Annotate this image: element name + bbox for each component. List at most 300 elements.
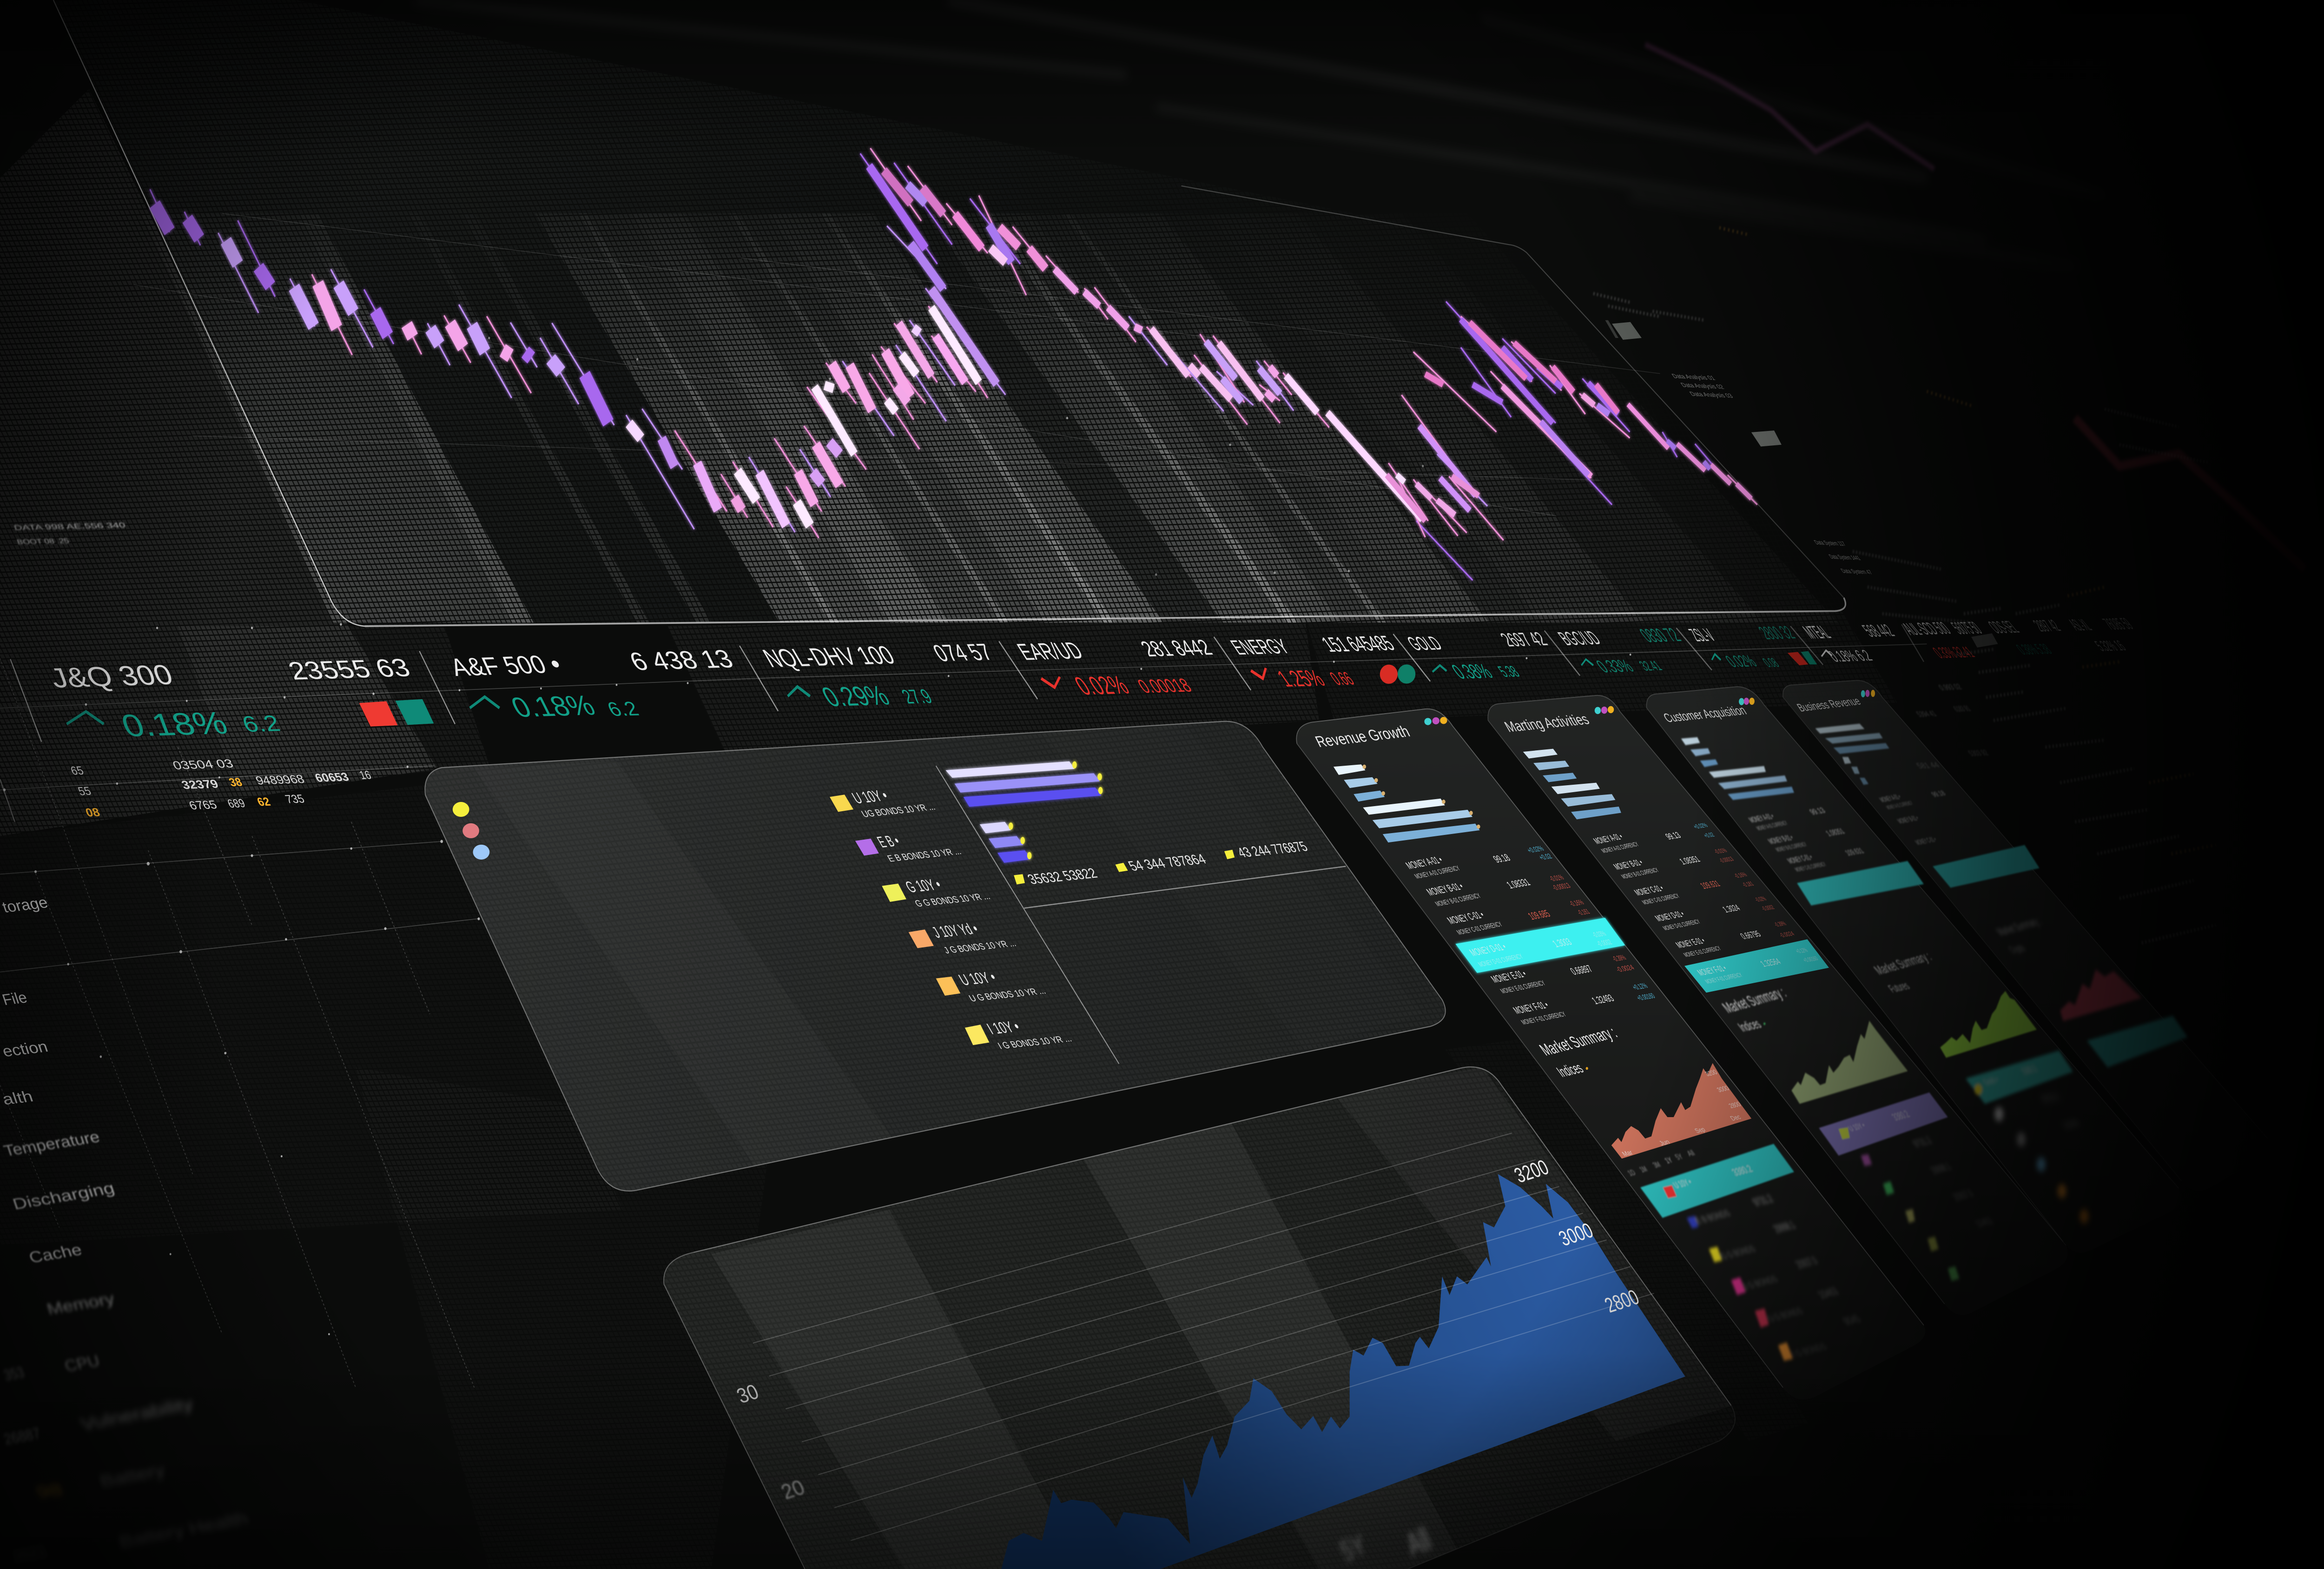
ticker names and prices: 23555 63 xyxy=(284,653,414,685)
change values: -0.0002 xyxy=(1760,904,1776,912)
heading: Revenue Growth xyxy=(1312,722,1413,750)
legend labels xyxy=(849,786,1074,1051)
ticker names and prices: 2897 42 xyxy=(2029,616,2065,635)
ticker up values teal: 2800 32 xyxy=(1754,622,1799,643)
change values: -0.39% xyxy=(1772,920,1788,928)
background dotted texture left xyxy=(0,89,1897,1569)
bar totals: 54 344 787864 xyxy=(1126,852,1209,874)
highlighted row: MONEY D-01 • xyxy=(1467,941,1509,958)
ticker names and prices: BGC/UD xyxy=(1554,628,1605,649)
left system labels: File xyxy=(0,988,29,1008)
left system labels: torage xyxy=(0,894,50,916)
ticker names and prices: EAR/UD xyxy=(1012,637,1088,665)
legend labels: E B • xyxy=(874,832,903,851)
market summary: Market Summary : xyxy=(1719,984,1790,1016)
ticker up values teal xyxy=(116,622,2056,743)
ticker names and prices: 568 442 xyxy=(1858,621,1899,641)
change values: +0.02 xyxy=(1702,831,1716,839)
chart axis labels: 3000 xyxy=(1555,1218,1597,1250)
window dots xyxy=(1424,717,1447,725)
currency rows: MONEY C-01 CURRENCY xyxy=(1793,861,1828,873)
currency rows: 99.13 xyxy=(1807,806,1828,816)
market summary xyxy=(1536,1023,1621,1080)
index rows xyxy=(1861,1135,1995,1281)
small number rows xyxy=(69,757,373,820)
area chart: Mar xyxy=(1620,1148,1634,1158)
currency rows: MONEY B-01 • xyxy=(1895,814,1921,825)
far right data readouts xyxy=(1593,228,2216,943)
left bodies xyxy=(155,204,608,423)
purple index row: 3380.2 xyxy=(1889,1109,1912,1123)
status text xyxy=(1915,682,1990,770)
ticker down values red: 1.25% xyxy=(1272,665,1330,692)
index rows xyxy=(1994,1091,2089,1224)
wicks xyxy=(150,148,1757,580)
area chart xyxy=(2060,969,2142,1021)
area chart: 3200 xyxy=(1703,1068,1719,1078)
ticker down values red: 0.33% 32.41 xyxy=(1929,643,1979,662)
currency rows: MONEY C-01 • xyxy=(1632,883,1666,897)
area chart: 3000 xyxy=(1715,1084,1731,1093)
legend swatches xyxy=(830,794,990,1045)
index rows: 9045 xyxy=(1840,1313,1863,1327)
ticker names and prices: 151 645485 xyxy=(1316,631,1400,656)
left system labels: Discharging xyxy=(10,1179,117,1213)
left system labels: Vulnerability xyxy=(78,1394,196,1434)
currency rows xyxy=(1747,806,1866,873)
index rows: 10463 xyxy=(1973,1216,1995,1230)
panel: bond legend and bars xyxy=(423,721,1446,1195)
index rows: 2999 xyxy=(2060,1118,2083,1132)
chart axis labels: 2800 xyxy=(1601,1285,1643,1317)
currency rows: 99.18 xyxy=(1491,852,1512,865)
ticker up values teal: 0.02% xyxy=(1721,651,1761,670)
panel: Business Revenue card xyxy=(1783,681,2270,1191)
teal index row xyxy=(2087,1016,2188,1067)
index rows: 20937.0 xyxy=(1793,1255,1820,1271)
market summary: Crypto xyxy=(2007,943,2028,956)
market summary: Futures xyxy=(1885,980,1912,995)
left system labels: CPU xyxy=(62,1352,102,1375)
background grid with nodes xyxy=(0,623,1927,1388)
chart gridlines xyxy=(753,1133,1654,1541)
legend labels: G 10Y • xyxy=(902,875,944,896)
ticker names and prices: 6 438 13 xyxy=(625,645,738,676)
status swatches xyxy=(359,651,1817,727)
tiny readout upper left: BOOT 08 .25 xyxy=(16,537,70,546)
currency rows: MONEY A-01 CURRENCY xyxy=(1413,865,1462,880)
change values: -0.00013 xyxy=(1551,882,1572,892)
small number rows: 32379 xyxy=(179,778,221,792)
small number rows: 55 xyxy=(76,785,93,798)
area chart: Sep xyxy=(1693,1125,1707,1134)
window dots xyxy=(453,802,489,860)
range selector xyxy=(1626,1149,1697,1178)
data analysis labels: Data Analysis 03 xyxy=(1688,390,1735,399)
highlighted row xyxy=(1455,918,1625,973)
currency rows: MONEY D-01 • xyxy=(1653,909,1687,923)
ticker names and prices: ENERGY xyxy=(1226,635,1294,659)
chart axis labels: 5Y xyxy=(1336,1529,1371,1568)
heading: Customer Acquisition xyxy=(1661,703,1749,725)
dim data dashes xyxy=(1593,228,2216,943)
ticker names and prices: GOLD xyxy=(1403,633,1446,654)
highlighted row: +0.00160 xyxy=(1801,955,1820,964)
ticker names and prices: ZSL-V xyxy=(1684,625,1719,645)
currency rows: MONEY A-01 CURRENCY xyxy=(1885,800,1915,811)
chart axis labels xyxy=(733,1155,1643,1568)
index rows: 29998.1 xyxy=(1928,1161,1954,1176)
small number rows: 6765 xyxy=(187,798,219,812)
ticker names and prices: J&Q 300 xyxy=(46,660,177,694)
legend labels: U G BONDS 10 YR ... xyxy=(967,986,1048,1004)
legend labels: UG BONDS 10 YR ... xyxy=(860,802,938,820)
ticker names and prices: A&F 500 • xyxy=(446,650,566,682)
highlighted row: -0.03% xyxy=(1591,930,1608,939)
area chart: Dec xyxy=(1729,1113,1743,1122)
index rows: 20937.0 xyxy=(1950,1188,1976,1203)
middle bodies xyxy=(629,351,911,525)
currency rows: 0.66897 xyxy=(1568,963,1595,977)
currency rows: MONEY B-01 • xyxy=(1766,833,1796,846)
range selector: 1Y xyxy=(1663,1156,1675,1165)
currency rows: MONEY E-01 • xyxy=(1489,968,1529,985)
far dim pink chart top right xyxy=(1645,45,2305,569)
window dots xyxy=(1861,690,1875,697)
currency rows: MONEY C-01 • xyxy=(1785,853,1815,865)
change values: -0.01% xyxy=(1712,847,1729,855)
area chart xyxy=(1791,1021,1908,1104)
area chart xyxy=(1001,1174,1685,1569)
range selector: 5Y xyxy=(1673,1152,1685,1162)
left system labels: Battery Health xyxy=(117,1509,250,1551)
teal index row xyxy=(1966,1051,2073,1104)
ticker up values teal: 6.2 xyxy=(238,711,284,737)
ticker names and prices: 2697 42 xyxy=(1496,629,1552,651)
currency rows: MONEY A-01 • xyxy=(1403,854,1445,871)
panel: Revenue Growth card xyxy=(1296,709,1925,1399)
ticker up values teal: 0.29% xyxy=(816,681,895,712)
left system labels: 353 xyxy=(2,1364,26,1384)
horizontal bars xyxy=(945,761,1103,863)
teal index row: 3380.2 xyxy=(1730,1163,1755,1178)
index rows: I G BONDS xyxy=(1789,1341,1829,1359)
area chart xyxy=(1940,991,2037,1058)
small number rows: 38 xyxy=(227,776,244,789)
legend labels: I 10Y • xyxy=(984,1017,1023,1038)
left system labels: 2021 xyxy=(11,1543,48,1565)
right bodies xyxy=(1055,269,1422,519)
panel: blue index chart xyxy=(661,1064,1740,1569)
market summary: Market Summary : xyxy=(1994,915,2044,938)
currency rows: MONEY B-01 CURRENCY xyxy=(1434,892,1483,908)
ticker names and prices: MTEAL xyxy=(1798,622,1835,642)
small number rows: 16 xyxy=(357,768,373,782)
purple index row xyxy=(1819,1092,1948,1156)
change values: -0.39% xyxy=(1611,953,1628,963)
highlighted row xyxy=(1933,845,2040,887)
currency rows: MONEY C-01 CURRENCY xyxy=(1455,920,1504,937)
change values: -0.0024 xyxy=(1777,930,1796,939)
ticker names and prices: 56075 50 xyxy=(1947,618,1986,638)
chart axis labels: 3200 xyxy=(1511,1155,1552,1187)
small number rows: 689 xyxy=(225,797,247,810)
window dots xyxy=(1595,706,1614,714)
ticker down values red: 0.02% xyxy=(1069,671,1135,700)
market summary: Indices xyxy=(1735,1017,1764,1034)
currency rows: MONEY B-01 CURRENCY xyxy=(1774,841,1809,853)
currency rows: MONEY A-01 • xyxy=(1747,812,1776,824)
left system labels xyxy=(0,894,250,1565)
currency rows: 99.13 xyxy=(1663,830,1683,841)
legend labels: J 10Y Yd • xyxy=(929,920,982,941)
small number rows: 735 xyxy=(284,793,306,806)
currency rows xyxy=(1591,830,1763,958)
left system labels: 26887 xyxy=(2,1425,43,1448)
bar totals: 43 244 776875 xyxy=(1235,839,1311,861)
left system labels: alth xyxy=(0,1087,35,1108)
ticker up values teal: 6.2 xyxy=(603,697,642,720)
change values: +0.02% xyxy=(1525,845,1546,855)
data analysis labels: Data System 117 xyxy=(1812,539,1847,547)
highlighted row: 1.3003 xyxy=(1550,936,1574,949)
teal index row: 3380.2 xyxy=(2019,1064,2040,1077)
change values: +0.02% xyxy=(1691,821,1709,830)
panel grid lines and nodes xyxy=(133,213,1660,576)
data analysis labels: Data Analysis 02 xyxy=(1679,381,1726,390)
legend labels: J G BONDS 10 YR ... xyxy=(942,939,1018,956)
currency rows: MONEY C-01 • xyxy=(1913,835,1939,847)
data analysis labels: Data Analysis 01 xyxy=(1670,372,1717,381)
ticker up values teal: 0.18% xyxy=(116,705,232,743)
change values: -0.16% xyxy=(1568,899,1586,908)
currency rows: 1.3024 xyxy=(1720,903,1742,914)
change values xyxy=(1691,821,1796,939)
currency rows: 99.18 xyxy=(1929,789,1948,799)
currency rows: MONEY A-01 • xyxy=(1591,831,1625,846)
currency rows: 109.685 xyxy=(1525,908,1553,922)
ticker names and prices: 281 8442 xyxy=(1136,636,1217,662)
currency rows xyxy=(1403,852,1617,1026)
currency rows: MONEY C-01 CURRENCY xyxy=(1640,892,1681,906)
index rows: 9731.2 xyxy=(2039,1091,2062,1105)
index rows: G G BONDS xyxy=(1718,1244,1757,1261)
currency rows: 1.08351 xyxy=(1677,854,1702,866)
ticker row xyxy=(0,615,2137,822)
legend labels: U 10Y • xyxy=(955,968,999,988)
legend labels: U 10Y • xyxy=(849,786,891,807)
range selector: 3M xyxy=(1651,1160,1663,1170)
highlighted row: MONEY F-01 CURRENCY xyxy=(1703,971,1744,985)
change values: -0.02% xyxy=(1753,895,1768,903)
ticker up values teal: 5.38 xyxy=(1494,663,1523,681)
ticker up values teal: 27.9 xyxy=(898,685,936,708)
currency rows: 109.631 xyxy=(1698,879,1722,891)
tiny readout upper left: DATA 998 AE.556 340 xyxy=(13,522,126,532)
currency rows: MONEY D-01 CURRENCY xyxy=(1661,918,1702,932)
ticker down values red: 0.66 xyxy=(1326,669,1358,689)
ticker names and prices: 76085 59 xyxy=(2099,615,2137,633)
heading: Marting Activities xyxy=(1501,711,1592,735)
area chart: Jun xyxy=(1657,1138,1671,1147)
currency rows xyxy=(1878,789,1948,847)
index rows: 29998.1 xyxy=(1770,1219,1798,1235)
heading: Business Revenue xyxy=(1795,695,1863,714)
small number rows: 62 xyxy=(255,795,272,809)
currency rows: 0.66795 xyxy=(1738,929,1763,941)
window dots xyxy=(1739,698,1755,705)
highlighted row xyxy=(1797,861,1924,906)
change values: -0.00013 xyxy=(1717,855,1735,864)
index rows: 9731.2 xyxy=(1750,1193,1776,1208)
market summary xyxy=(1994,915,2044,956)
currency rows: MONEY F-01 CURRENCY xyxy=(1520,1011,1568,1026)
status text: 6183 91 xyxy=(1952,704,1973,713)
ticker names and prices: ODS-SEL xyxy=(1984,617,2023,637)
change values: -0.0024 xyxy=(1614,964,1636,974)
currency rows: 1.08351 xyxy=(1824,827,1847,838)
teal index row: Gold • xyxy=(1981,1075,2001,1087)
small number rows: 9489968 xyxy=(254,773,306,788)
bars xyxy=(1815,724,1889,785)
currency rows: MONEY B-01 CURRENCY xyxy=(1620,867,1660,880)
change values: +0.02 xyxy=(1537,853,1554,862)
ticker down values red: 0.00018 xyxy=(1133,675,1196,697)
ticker up values teal: 0.18% xyxy=(506,690,601,723)
range selector: All xyxy=(1685,1149,1697,1158)
bar totals xyxy=(1014,839,1311,887)
ticker up values teal: 32.41 xyxy=(1636,658,1665,674)
index rows: U G BONDS xyxy=(1766,1306,1805,1324)
panel: Marting Activities card xyxy=(1488,695,2068,1315)
ticker up values teal: 0.38% 5.38 xyxy=(2013,641,2056,658)
panel: main candlestick chart surface xyxy=(53,0,1845,626)
left system labels: Battery xyxy=(98,1460,167,1490)
left system labels: Memory xyxy=(44,1290,117,1318)
legend labels: E B BONDS 10 YR ... xyxy=(886,847,963,864)
status text: 5394 41 xyxy=(1915,709,1939,719)
change values: +0.12% xyxy=(1631,982,1650,992)
highlighted row: MONEY F-01 • xyxy=(1695,963,1729,978)
currency rows: MONEY A-01 CURRENCY xyxy=(1599,841,1640,854)
currency rows: MONEY F-01 • xyxy=(1511,999,1551,1016)
highlighted row: -0.0002 xyxy=(1595,938,1614,948)
status text: 581 44 xyxy=(1915,761,1941,770)
chart panel outline xyxy=(53,0,1845,626)
area chart xyxy=(1611,1063,1751,1159)
left system labels: ection xyxy=(0,1038,50,1060)
bars xyxy=(1334,764,1480,842)
teal index row xyxy=(1640,1144,1794,1218)
left system labels: Temperature xyxy=(1,1128,102,1160)
ticker up values teal: 0830 72 xyxy=(1635,624,1686,647)
market summary xyxy=(1719,984,1790,1034)
blue chart streaks xyxy=(661,1064,1740,1569)
range selector: 1M xyxy=(1637,1165,1650,1174)
chart axis labels: 30 xyxy=(733,1379,762,1408)
change values: -0.161 xyxy=(1576,908,1591,917)
market summary: Market Summary : xyxy=(1536,1023,1621,1059)
grey status chips xyxy=(1605,320,1998,648)
ticker names and prices xyxy=(46,615,2137,694)
panel dividers xyxy=(936,766,1346,1064)
small number rows: 65 xyxy=(69,764,86,778)
purple index row: U 10Y • xyxy=(1846,1121,1868,1133)
ticker names and prices: 0.18% 6.2 xyxy=(1824,647,1876,665)
currency rows: MONEY A-01 • xyxy=(1878,793,1903,804)
status text: 5303 92 xyxy=(1966,748,1990,758)
ticker names and prices: ASL-XL xyxy=(2065,616,2096,634)
bar totals: 35632 53822 xyxy=(1025,866,1100,887)
index rows: 10463 xyxy=(1815,1285,1841,1301)
ticker names and prices: NQL-DHV 100 xyxy=(758,641,900,673)
data analysis labels: Data System 47 xyxy=(1839,567,1874,576)
ticker names and prices: AUL-SCD 500 xyxy=(1898,619,1955,639)
bars xyxy=(1523,749,1621,819)
ticker names and prices: 5.32% 16 xyxy=(2092,638,2130,655)
change values xyxy=(1525,845,1657,1002)
highlighted row: 1.32564 xyxy=(1758,956,1783,968)
currency rows: MONEY B-01 • xyxy=(1611,857,1645,872)
currency rows: MONEY C-01 • xyxy=(1445,909,1487,927)
change values: -0.01% xyxy=(1548,874,1566,883)
data analysis labels xyxy=(1670,372,1874,576)
panel texture xyxy=(475,726,1422,1165)
currency rows: 1.08331 xyxy=(1504,877,1533,891)
ticker dividers xyxy=(0,624,1924,822)
change values: -0.181 xyxy=(1740,880,1755,888)
small number rows: 08 xyxy=(84,806,102,820)
legend labels: I G BONDS 10 YR ... xyxy=(996,1034,1074,1051)
status text: 0.993 02 xyxy=(1937,682,1964,692)
data analysis labels: Data System 1441 xyxy=(1827,553,1862,561)
highlighted row: MONEY D-01 CURRENCY xyxy=(1477,953,1525,968)
ticker up values teal: 0.33% xyxy=(1592,656,1638,676)
legend labels: G G BONDS 10 YR ... xyxy=(913,892,992,909)
left system labels: Cache xyxy=(26,1241,84,1266)
index rows: E B BONDS xyxy=(1693,1208,1732,1225)
ticker up values teal: 0.08 xyxy=(1760,656,1783,670)
far-field blurred data lines at the top xyxy=(415,0,2105,267)
ticker names and prices: 074 57 xyxy=(928,638,997,666)
currency rows: 1.32493 xyxy=(1589,993,1617,1006)
market summary: Indices xyxy=(1553,1059,1587,1080)
small number rows: 03504 03 xyxy=(171,757,235,772)
bars xyxy=(1681,737,1794,800)
left system labels: 98 xyxy=(33,1480,65,1501)
highlighted row: +0.12% xyxy=(1794,947,1809,955)
ticker chevrons xyxy=(66,650,1832,724)
index rows: 9731.2 xyxy=(1910,1135,1934,1150)
chart axis labels: 20 xyxy=(778,1475,808,1504)
currency rows: MONEY E-01 CURRENCY xyxy=(1499,980,1547,995)
panel: Customer Acquisition card xyxy=(1646,687,2181,1253)
index rows xyxy=(1687,1193,1863,1361)
teal index row: U 10Y • xyxy=(1671,1177,1694,1190)
index rows: J G BONDS xyxy=(1741,1274,1780,1291)
market summary: Market Summary : xyxy=(1871,949,1935,977)
change values: +0.00160 xyxy=(1635,992,1657,1002)
highlighted row xyxy=(1684,939,1829,993)
currency rows: MONEY A-01 CURRENCY xyxy=(1755,820,1789,832)
panel streaks xyxy=(141,213,1838,622)
currency rows: MONEY E-01 • xyxy=(1673,935,1707,950)
candlestick chart xyxy=(150,148,1757,580)
chart axis labels: All xyxy=(1401,1520,1436,1563)
currency rows: 109.631 xyxy=(1843,847,1866,857)
ticker up values teal: 0.38% xyxy=(1447,661,1497,683)
small number rows: 60653 xyxy=(313,771,351,785)
